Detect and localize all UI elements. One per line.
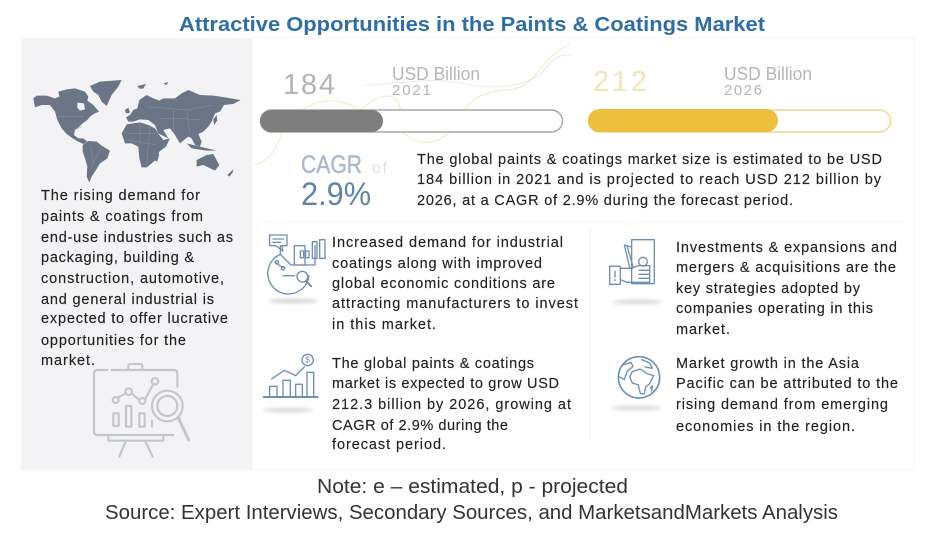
text: investment strategies: market. xyxy=(676,322,730,338)
text: left summary: market. xyxy=(41,353,95,369)
text: market overview: The global paints & coatings market size is estimated to be USD xyxy=(417,152,882,168)
text: industrial coatings: Increased demand for industrial xyxy=(332,235,563,251)
text: left summary: packaging, building & xyxy=(41,250,194,266)
metric: 2021: USD Billion xyxy=(392,64,480,84)
icon: analysis chart xyxy=(268,235,325,294)
icon: growth bars with dollar coin xyxy=(264,354,318,397)
text: investment strategies: companies operating in this xyxy=(676,301,873,317)
text: market overview: 2026, at a CAGR of 2.9% during the forecast period. xyxy=(417,193,793,209)
panel: market growth insight xyxy=(263,354,571,453)
text: market growth: forecast period. xyxy=(332,437,446,453)
metric: 2021: 184 xyxy=(283,69,335,101)
panel: investment strategies insight xyxy=(610,240,897,338)
metric: 2021: 2021 xyxy=(392,82,431,99)
CAGR callout: CAGR xyxy=(301,151,362,179)
text: Asia Pacific: rising demand from emerging xyxy=(676,397,888,413)
text: left summary: paints & coatings from xyxy=(41,209,203,225)
source: Source: Expert Interviews, Secondary Sources, and MarketsandMarkets Analysis xyxy=(105,502,838,524)
panel: Asia Pacific insight xyxy=(612,356,898,435)
text: left summary: construction, automotive, xyxy=(41,271,224,287)
CAGR callout: of xyxy=(372,160,388,177)
text: left summary: and general industrial is xyxy=(41,292,214,308)
text: market growth: The global paints & coatings xyxy=(332,356,534,372)
text: industrial coatings: global economic conditions are xyxy=(332,276,555,292)
icon: growth bars with dollar coin: $ xyxy=(305,356,310,365)
panel: market size and CAGR xyxy=(255,45,890,212)
text: investment strategies xyxy=(676,240,897,338)
text: industrial coatings: attracting manufacturers to invest xyxy=(332,296,578,312)
decorative wave xyxy=(255,45,572,165)
metric: 2026 xyxy=(588,64,890,132)
text: market growth: 212.3 billion by 2026, growing at xyxy=(332,397,571,413)
text: industrial coatings xyxy=(332,235,578,333)
text: market growth xyxy=(332,356,571,453)
title: Attractive Opportunities in the Paints & Coatings Market xyxy=(179,14,765,36)
metric: 2026: USD Billion xyxy=(724,64,812,84)
text: Asia Pacific: Pacific can be attributed to the xyxy=(676,376,898,392)
icon: globe xyxy=(618,357,660,398)
text: investment strategies: Investments & expansions and xyxy=(676,240,897,256)
text: market overview: 184 billion in 2021 and is projected to reach USD 212 billion by xyxy=(417,172,882,188)
text: Asia Pacific xyxy=(676,356,898,435)
text: left summary: expected to offer lucrative xyxy=(41,311,228,327)
text: left summary xyxy=(41,188,233,369)
text: market growth: market is expected to grow USD xyxy=(332,376,559,392)
text: investment strategies: mergers & acquisitions are the xyxy=(676,260,896,276)
text: market overview xyxy=(417,152,882,209)
panel: left summary xyxy=(21,38,252,470)
metric: 2021 xyxy=(260,64,562,132)
icon: presentation board with magnifier xyxy=(94,364,189,457)
text: investment strategies: key strategies adopted by xyxy=(676,281,861,297)
icon: world map xyxy=(33,80,241,183)
text: industrial coatings: in this market. xyxy=(332,317,436,333)
metric: 2026: 212 xyxy=(593,66,647,98)
text: left summary: The rising demand for xyxy=(41,188,200,204)
CAGR callout: 2.9% xyxy=(301,176,371,212)
text: Asia Pacific: economies in the region. xyxy=(676,419,855,435)
text: industrial coatings: coatings along with improved xyxy=(332,256,542,272)
note: Note: e – estimated, p - projected xyxy=(317,476,628,498)
icon: hand holding money xyxy=(610,240,654,284)
CAGR callout xyxy=(301,151,388,212)
text: Asia Pacific: Market growth in the Asia xyxy=(676,356,860,372)
metric: 2026: 2026 xyxy=(724,82,762,99)
bar: 2026 xyxy=(588,109,890,132)
text: left summary: opportunities for the xyxy=(41,333,186,349)
text: market growth: CAGR of 2.9% during the xyxy=(332,418,508,434)
text: left summary: end-use industries such as xyxy=(41,230,233,246)
bar: 2021 xyxy=(260,110,562,132)
panel: industrial coatings insight xyxy=(268,235,578,333)
